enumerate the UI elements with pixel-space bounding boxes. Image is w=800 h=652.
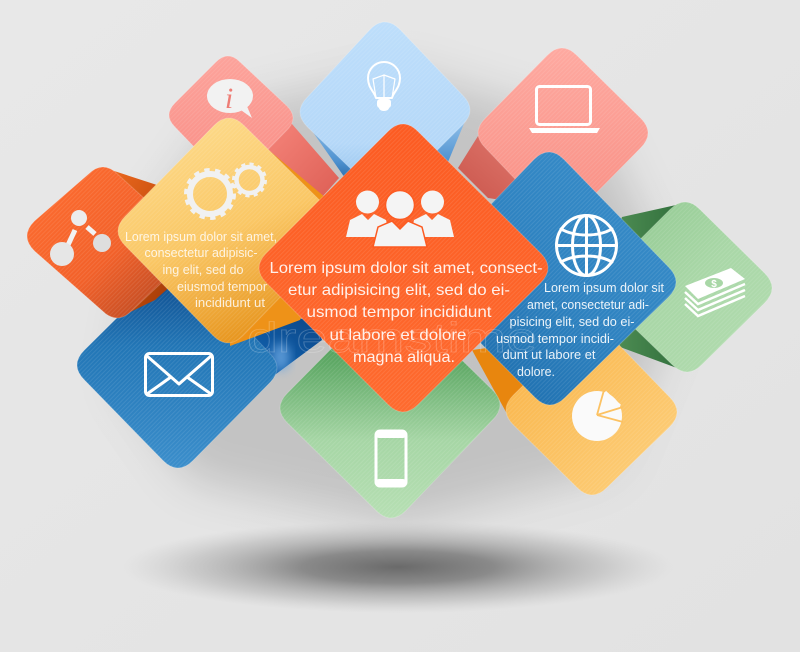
text block: globe: usmod tempor incidi- — [496, 332, 614, 346]
panel: money cube — [598, 202, 772, 372]
text block: team: usmod tempor incididunt — [306, 304, 492, 321]
text block: team: etur adipisicing elit, sed do ei- — [288, 282, 510, 299]
icon: gears — [186, 164, 265, 218]
text block: gears — [125, 230, 277, 310]
icon: globe — [556, 216, 616, 276]
icon: team of people — [346, 190, 454, 247]
text block: gears: eiusmod tempor — [177, 280, 267, 294]
text block: globe: dunt ut labore et — [502, 348, 596, 362]
text block: globe: Lorem ipsum dolor sit — [544, 281, 665, 295]
icon: laptop — [529, 86, 600, 133]
icon: info speech bubble: i — [225, 82, 233, 115]
icon: envelope — [146, 354, 212, 396]
panel: info cube — [169, 56, 339, 222]
icon: banknote stack — [685, 268, 745, 316]
panel: globe cube — [425, 152, 676, 405]
icon: banknote stack: $ — [711, 279, 717, 290]
cube cast shadow — [120, 70, 680, 525]
text block: gears: Lorem ipsum dolor sit amet, — [125, 230, 277, 244]
text block: globe: amet, consectetur adi- — [527, 298, 649, 312]
text block: team: magna aliqua. — [353, 349, 455, 366]
panel: light bulb cube — [300, 22, 470, 195]
text block: team: Lorem ipsum dolor sit amet, consect- — [270, 260, 542, 277]
panel: network cube — [27, 167, 200, 318]
icon: pie chart — [572, 390, 623, 441]
icon: light bulb — [368, 62, 400, 111]
text block: globe: dolore. — [517, 365, 555, 379]
panel: gears cube — [118, 118, 346, 346]
icon: smartphone — [376, 431, 406, 486]
floor shadow — [123, 521, 673, 613]
icon: network nodes — [50, 210, 111, 266]
text block: gears: consectetur adipisic- — [144, 246, 258, 260]
text block: globe: pisicing elit, sed do ei- — [510, 315, 634, 329]
panel: laptop cube — [458, 48, 648, 220]
panel: envelope cube — [77, 265, 322, 468]
text block: team — [270, 260, 542, 366]
panel: phone cube — [280, 297, 500, 518]
text block: globe — [496, 281, 665, 379]
panel: team centre card — [259, 124, 548, 412]
text block: team: ut labore et dolore — [330, 327, 467, 344]
panel: pie chart cube — [472, 325, 677, 495]
watermark: dreamstime — [247, 314, 537, 361]
icon: info speech bubble — [207, 79, 253, 118]
text block: gears: incididunt ut — [195, 296, 266, 310]
text block: gears: ing elit, sed do — [162, 263, 244, 277]
